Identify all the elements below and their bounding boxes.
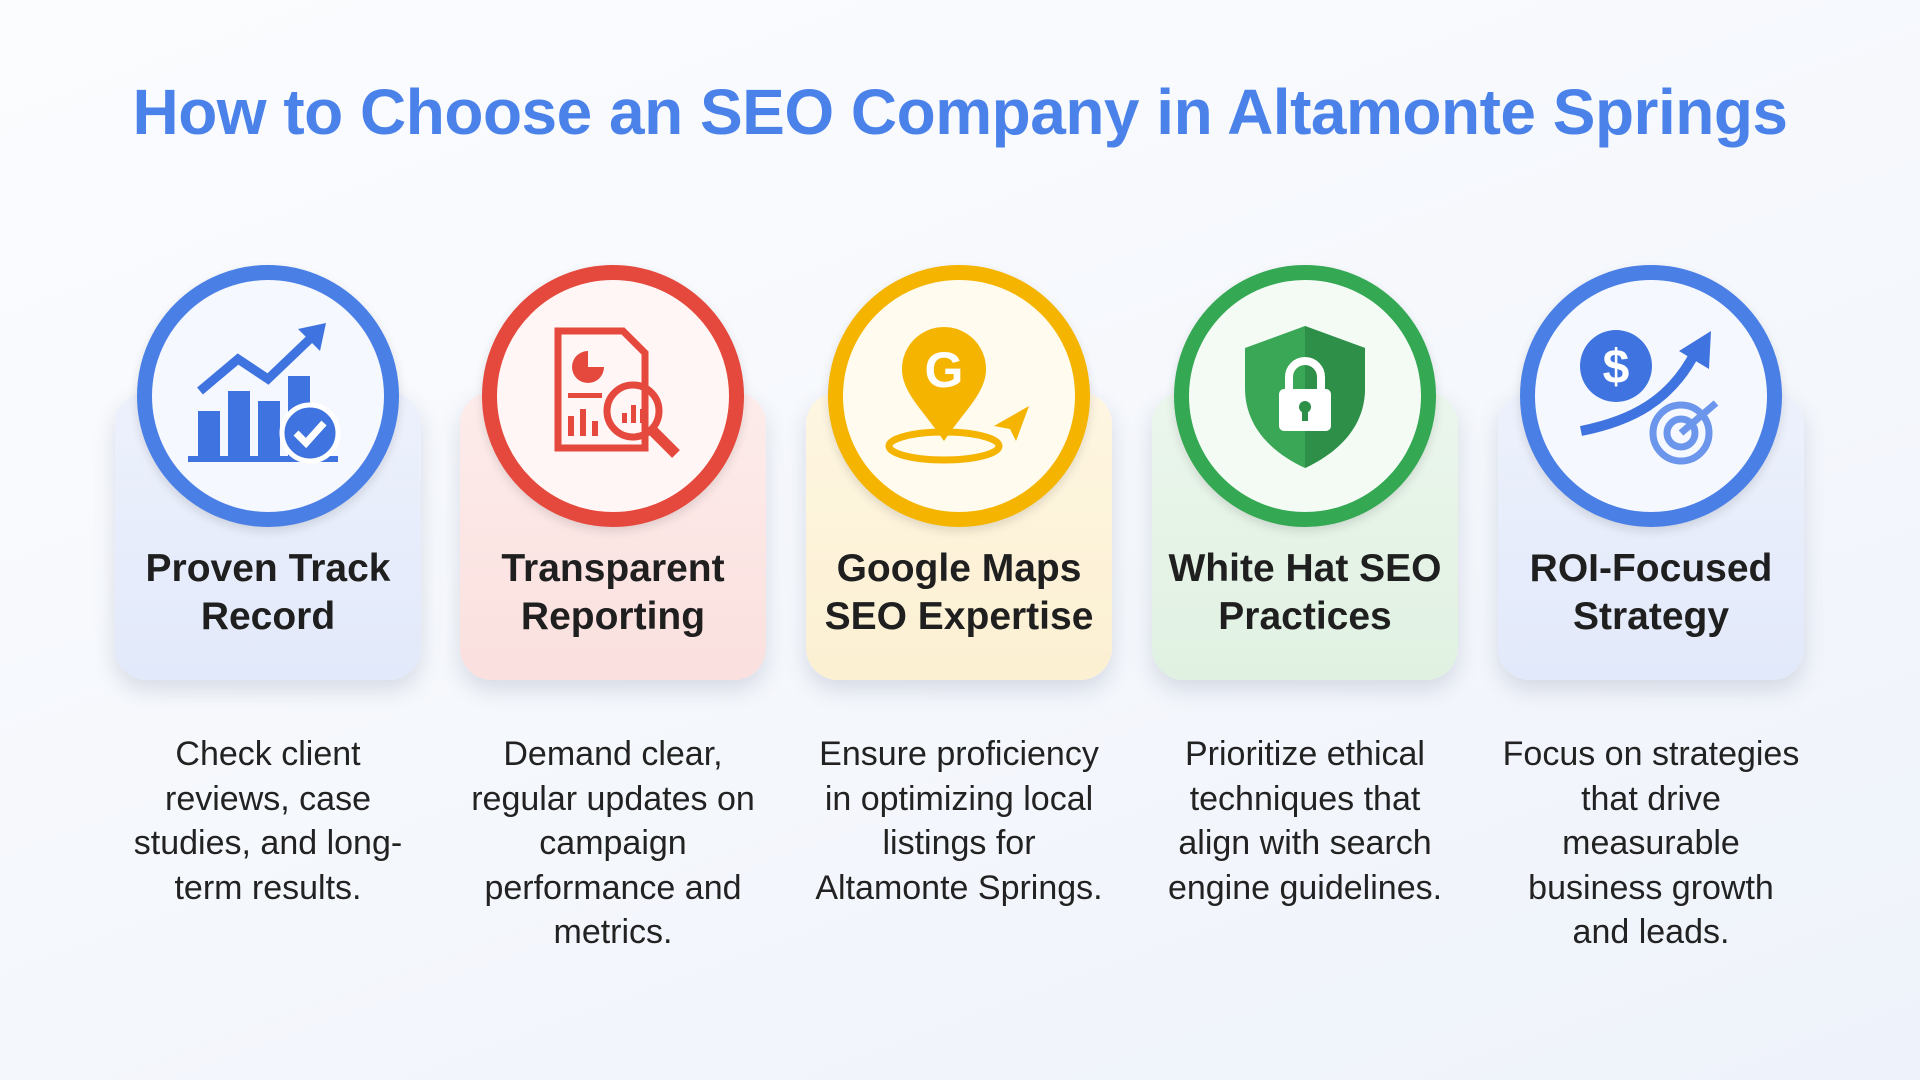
description: Altamonte Springs. [815,868,1103,906]
card title [825,547,1093,638]
icon: dollar target [1520,265,1782,527]
description: listings for [882,824,1036,862]
description: Check client [175,735,361,773]
description: metrics. [554,913,672,951]
description: and leads. [1573,913,1729,951]
panel: roi [1491,265,1811,951]
icon: map pin: G [925,342,963,398]
description: that drive [1581,780,1721,818]
card title [501,547,725,638]
icon: report magnifier [482,265,744,527]
description: studies, and long- [134,824,402,862]
description [815,735,1103,906]
icon: map pin [828,265,1090,527]
panel: transparent reporting [453,265,773,951]
description: Prioritize ethical [1185,735,1425,773]
description: term results. [174,868,362,906]
panel: proven track record [108,265,428,906]
description: reviews, case [165,780,371,818]
card title: ROI-Focused [1530,547,1772,590]
description: Ensure proficiency [819,735,1099,773]
card title: Strategy [1573,595,1729,638]
description: engine guidelines. [1168,868,1442,906]
card title: Record [201,595,335,638]
description [134,735,402,906]
description: measurable [1562,824,1740,862]
description [471,735,755,951]
icon: dollar target: $ [1603,341,1630,394]
description: campaign [539,824,687,862]
card title: Google Maps [837,547,1081,590]
description: in optimizing local [825,780,1093,818]
description: Demand clear, [503,735,723,773]
description: Focus on strategies [1503,735,1799,773]
card title: Practices [1218,595,1392,638]
card title: Transparent [501,547,725,590]
card title: Reporting [521,595,705,638]
description [1503,735,1799,951]
title: How to Choose an SEO Company in Altamonte Springs [132,76,1788,148]
card title [1168,547,1442,638]
card title: Proven Track [146,547,390,590]
card title: SEO Expertise [825,595,1093,638]
panel: white hat [1145,265,1465,906]
panel: google maps [799,265,1119,906]
description: techniques that [1190,780,1420,818]
icon: shield lock [1174,265,1436,527]
description: business growth [1528,868,1774,906]
description: align with search [1178,824,1432,862]
description: performance and [484,868,742,906]
icon: growth chart [137,265,399,527]
description: regular updates on [471,780,755,818]
description [1168,735,1442,906]
card title [146,547,390,638]
card title [1530,547,1772,638]
card title: White Hat SEO [1168,547,1442,590]
